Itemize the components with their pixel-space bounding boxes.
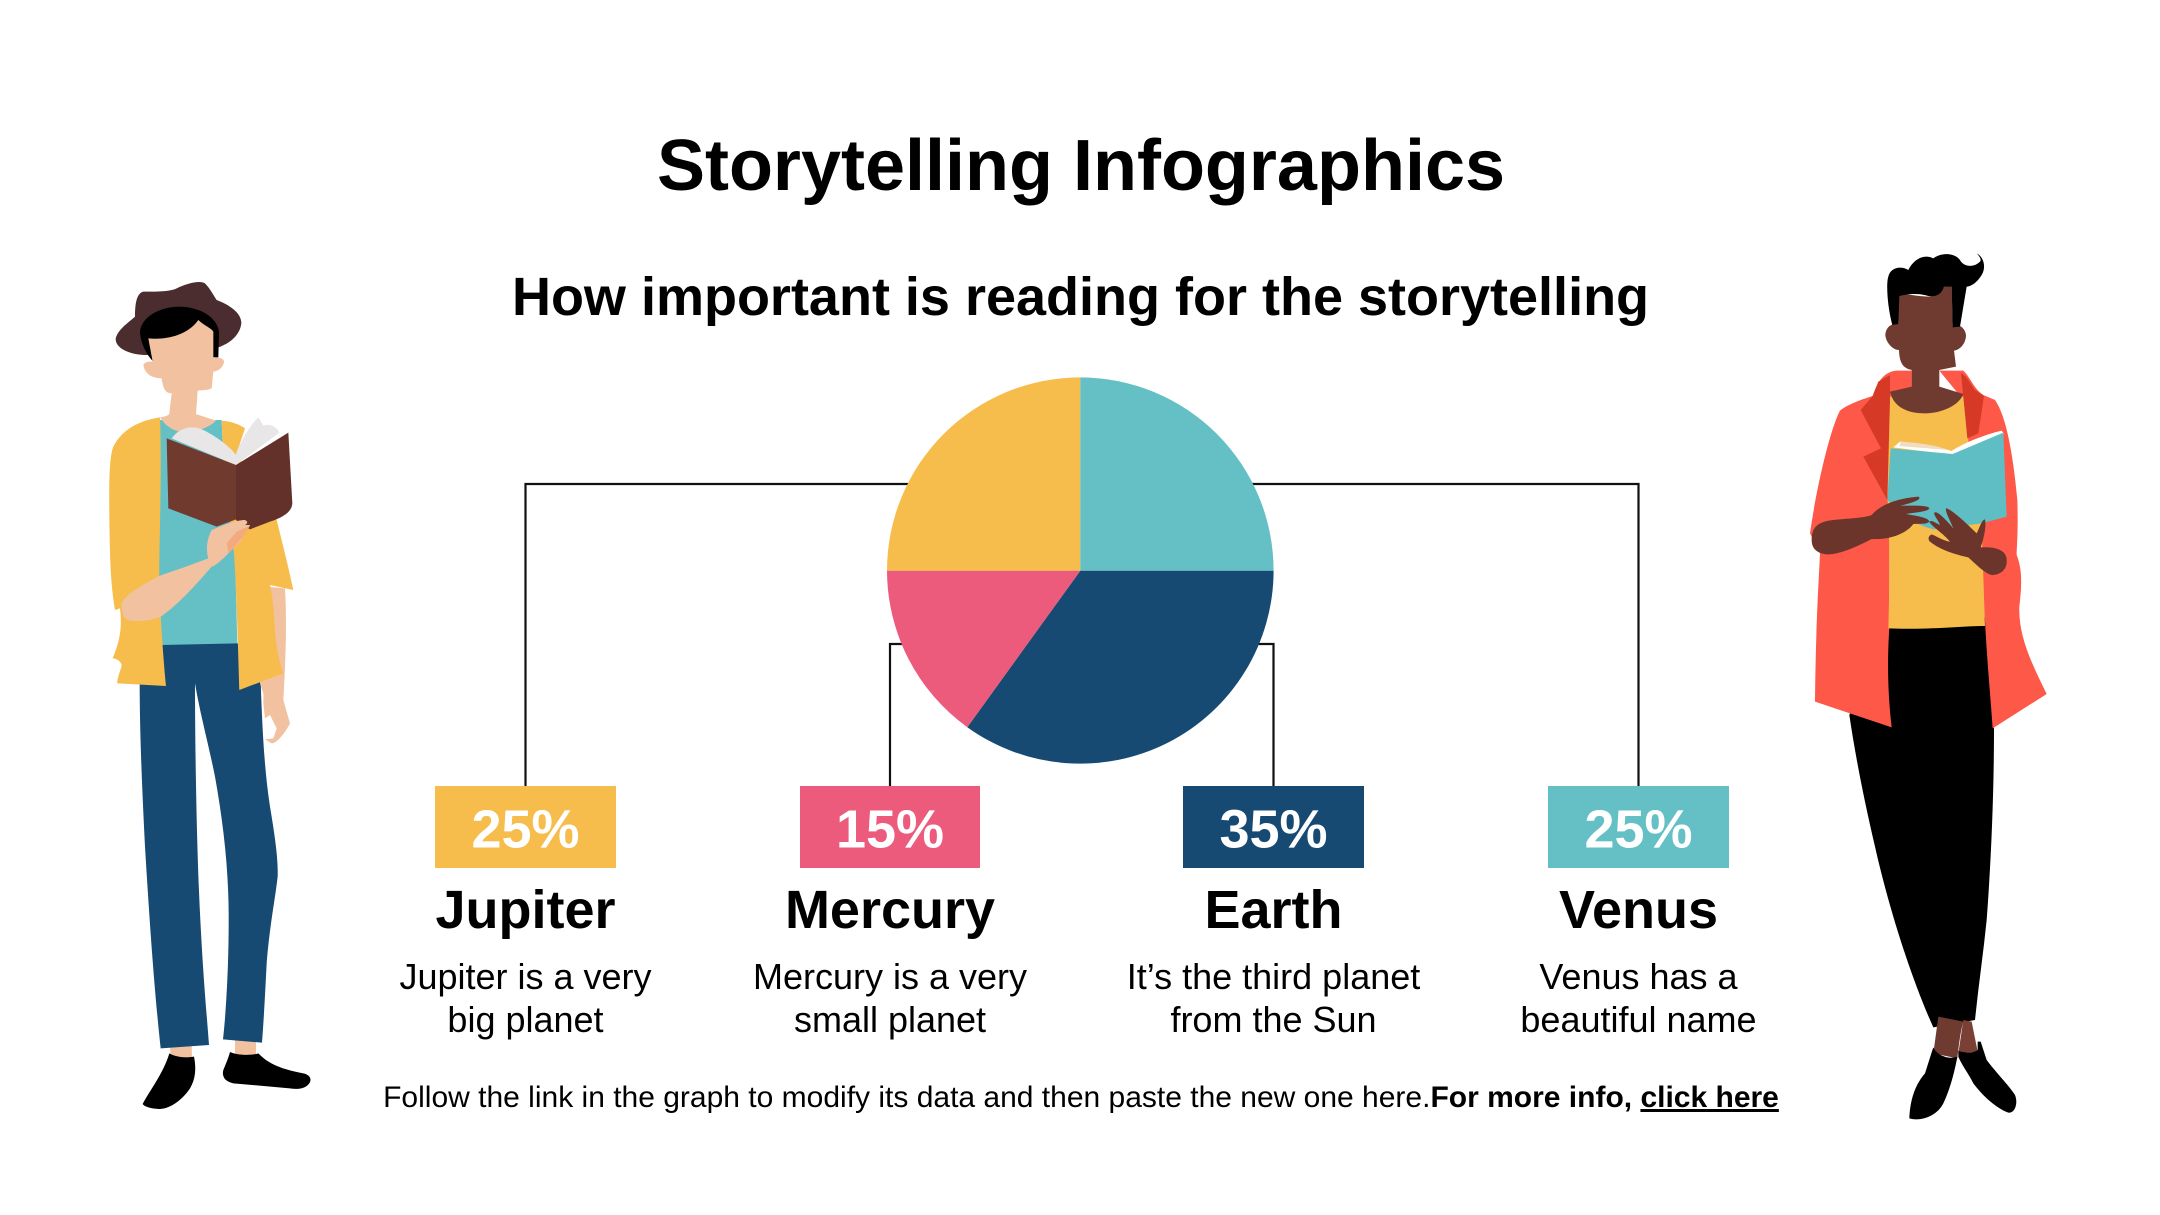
left hand and arm [1812, 497, 1929, 554]
Venus description: Venus has a [1539, 956, 1739, 997]
panel: Jupiter [399, 786, 652, 1040]
left lapel [1861, 375, 1890, 500]
back shoe [1958, 1042, 2016, 1113]
Jupiter description: Jupiter is a very [399, 956, 652, 997]
book cover [1887, 433, 2007, 529]
forearm and hand [122, 520, 250, 621]
right lapel [1961, 373, 1984, 438]
Jupiter heading: Jupiter [435, 880, 616, 940]
pie slice: Earth 35% [967, 571, 1274, 764]
title: Storytelling Infographics [657, 126, 1505, 206]
right shoe [223, 1052, 310, 1089]
book pages [1893, 431, 2004, 455]
book pages [172, 417, 279, 465]
Earth description: It’s the third planet [1127, 956, 1420, 997]
footer note: Follow the link in the graph to modify its data and then paste the new one here.For more info, click here [383, 1081, 1779, 1114]
panel: Venus [1520, 786, 1757, 1040]
connector lines [526, 484, 1638, 786]
Mercury description: Mercury is a very [753, 956, 1027, 997]
pie chart [887, 377, 1274, 764]
pie slice: Mercury 15% [887, 571, 1080, 727]
Earth percentage: 35% [1219, 800, 1328, 860]
hanging hand [263, 673, 290, 743]
hanging arm [260, 586, 286, 700]
cardigan right panel [222, 421, 293, 690]
Earth heading: Earth [1204, 880, 1343, 940]
hair [1887, 253, 1984, 327]
left figure torso [109, 282, 293, 700]
panel: Mercury [753, 786, 1027, 1040]
Mercury description: small planet [794, 999, 986, 1040]
finger shading [227, 526, 250, 553]
head and neck [1885, 283, 1966, 413]
Venus percentage: 25% [1584, 800, 1693, 860]
Jupiter percentage box [435, 786, 616, 868]
jacket left panel [1810, 371, 1912, 727]
left figure legs [140, 643, 310, 1109]
t-shirt [1887, 397, 1985, 629]
front ankle [1933, 1017, 1963, 1058]
Venus percentage box [1548, 786, 1729, 868]
trousers [1849, 617, 1994, 1027]
Venus heading: Venus [1559, 880, 1718, 940]
t-shirt [159, 420, 237, 645]
left figure: reader with hat [109, 282, 310, 1109]
pie slice: Jupiter 25% [887, 377, 1080, 571]
Jupiter percentage: 25% [471, 800, 580, 860]
head and neck [143, 320, 224, 432]
cardigan left panel [109, 417, 166, 686]
Mercury percentage box [800, 786, 980, 868]
subtitle: How important is reading for the storytelling [512, 267, 1649, 327]
front shoe [1909, 1047, 1957, 1119]
jacket right panel [1939, 371, 2047, 728]
Earth description: from the Sun [1170, 999, 1377, 1040]
page edge [1899, 442, 1948, 450]
book right cover [236, 433, 292, 529]
trousers [140, 643, 278, 1048]
right figure: reader with coral jacket [1810, 253, 2047, 1119]
left shoe [143, 1053, 195, 1109]
Venus description: beautiful name [1520, 999, 1757, 1040]
hat [116, 282, 241, 355]
Jupiter description: big planet [447, 999, 604, 1040]
book left cover [167, 438, 236, 527]
hair [140, 307, 219, 362]
Mercury heading: Mercury [785, 880, 995, 940]
Mercury percentage: 15% [836, 800, 944, 860]
panel: Earth [1127, 786, 1420, 1040]
ankles [170, 1040, 256, 1058]
back ankle [1958, 1020, 1978, 1053]
pie slice: Venus 25% [1080, 377, 1274, 571]
Earth percentage box [1183, 786, 1364, 868]
right hand and arm [1929, 508, 2007, 575]
